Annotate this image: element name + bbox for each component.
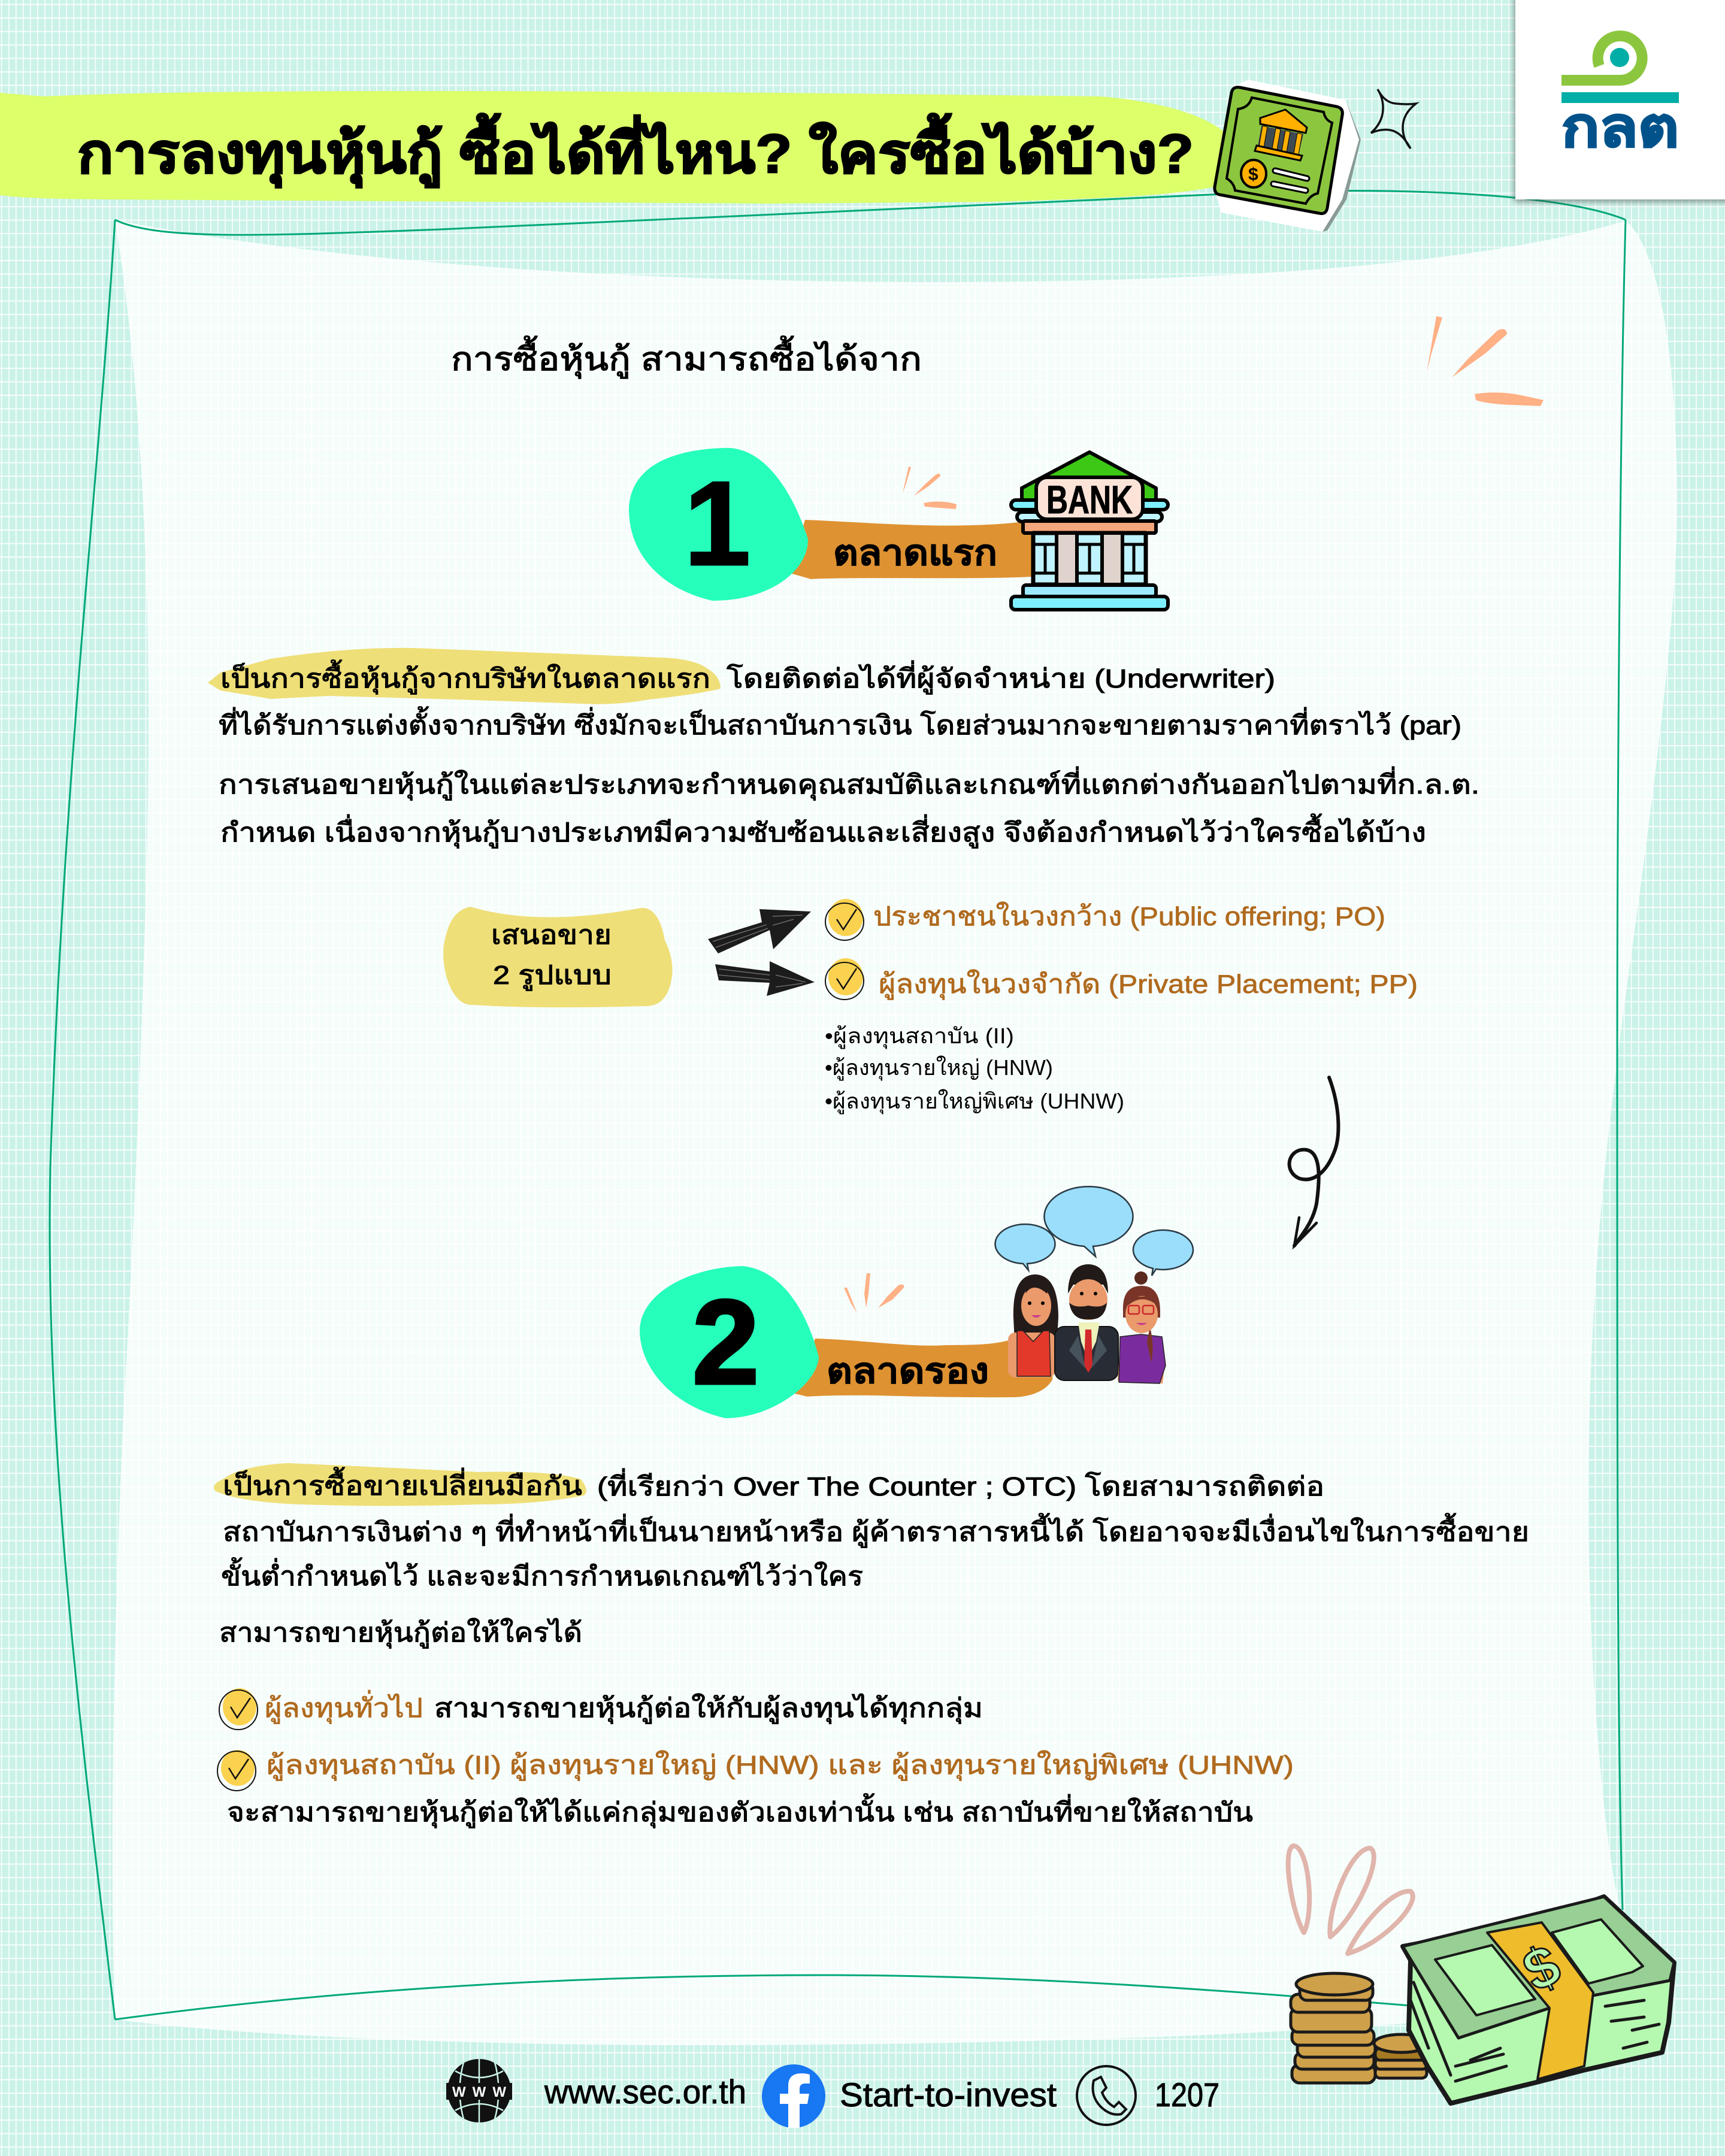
paragraph: section 2: สถาบันการเงินต่าง ๆ ที่ทำหน้าที่เป็นนายหน้าหรือ ผู้ค้าตราสารหนี้ได้ โดยอาจจะมีเงื่อนไขในการซื้อขาย xyxy=(223,1513,1529,1548)
paragraph: section 1 xyxy=(219,659,1479,849)
section 1 number: 1 xyxy=(684,457,750,591)
text: institutional investors: ผู้ลงทุนสถาบัน (II) ผู้ลงทุนรายใหญ่ (HNW) และ ผู้ลงทุนรายใหญ่พิเศษ (UHNW) xyxy=(267,1750,1294,1781)
paragraph: section 2: สามารถขายหุ้นกู้ต่อให้ใครได้ xyxy=(219,1618,582,1649)
icon: money bundle xyxy=(1403,1897,1674,2103)
arrow: curly xyxy=(1290,1077,1338,1246)
logo panel xyxy=(1515,0,1725,199)
text: general investors: ผู้ลงทุนทั่วไป xyxy=(265,1689,423,1724)
title band xyxy=(0,91,1234,204)
title: การลงทุนหุ้นกู้ ซื้อได้ที่ไหน? ใครซื้อได้บ้าง? xyxy=(77,113,1194,188)
footer xyxy=(446,2059,1219,2128)
paragraph: section 2: ขั้นต่ำกำหนดไว้ และจะมีการกำหนดเกณฑ์ไว้ว่าใคร xyxy=(221,1557,863,1591)
speech bubbles xyxy=(995,1186,1193,1276)
list: investor types xyxy=(825,1024,1124,1115)
icon: sparkle star xyxy=(1371,89,1416,149)
list: investor types: •ผู้ลงทุนรายใหญ่ (HNW) xyxy=(825,1055,1053,1081)
text: institutional investors: จะสามารถขายหุ้นกู้ต่อให้ได้แค่กลุ่มของตัวเองเท่านั้น เช่น สถาบันที่ขายให้สถาบัน xyxy=(227,1793,1253,1828)
icon: check 1 xyxy=(825,899,864,940)
paragraph: section 1: โดยติดต่อได้ที่ผู้จัดจำหน่าย (Underwriter) xyxy=(727,660,1275,695)
section 2 number blob xyxy=(640,1266,819,1418)
icon: facebook xyxy=(762,2064,825,2128)
icon: dollar sign on band: $ xyxy=(1514,1933,1570,2004)
icon: bond certificate xyxy=(1215,80,1361,232)
text: private placement: ผู้ลงทุนในวงจำกัด (Private Placement; PP) xyxy=(879,969,1418,1000)
icon: coin stacks xyxy=(1291,1973,1429,2083)
panel outline xyxy=(50,191,1626,2019)
text: general investors xyxy=(265,1689,983,1724)
decoration: pink loops xyxy=(1288,1846,1413,1954)
box: offering types xyxy=(443,907,672,1007)
paragraph: section 2: (ที่เรียกว่า Over The Counter ; OTC) โดยสามารถติดต่อ xyxy=(597,1468,1324,1501)
decoration: peach burst section 2 xyxy=(844,1273,904,1313)
icon: bank building xyxy=(1011,452,1168,610)
facebook name: Start-to-invest xyxy=(840,2076,1057,2113)
highlight: section 2 xyxy=(214,1463,586,1506)
bank sign text: BANK xyxy=(1046,477,1133,522)
logo: teal dot xyxy=(1610,48,1629,67)
list: investor types: •ผู้ลงทุนรายใหญ่พิเศษ (UHNW) xyxy=(825,1089,1124,1115)
section 2 number: 2 xyxy=(692,1276,759,1409)
people: three investors xyxy=(1008,1264,1166,1383)
section 2 label: ตลาดรอง xyxy=(827,1352,989,1391)
box: offering types: เสนอขาย xyxy=(491,920,612,950)
person: woman in purple xyxy=(1118,1271,1166,1383)
paragraph: section 2: เป็นการซื้อขายเปลี่ยนมือกัน xyxy=(223,1467,582,1501)
icon: check 4 xyxy=(217,1750,256,1791)
logo: teal bar xyxy=(1561,92,1679,103)
website: www.sec.or.th xyxy=(544,2073,746,2110)
hotline: 1207 xyxy=(1155,2076,1219,2113)
decoration: peach burst top right xyxy=(1427,316,1544,406)
person: woman in red xyxy=(1008,1274,1058,1377)
highlight: section 1 xyxy=(208,648,721,704)
arrow: to public offering xyxy=(708,909,811,953)
panel: main content sheet xyxy=(113,220,1677,2045)
subheading: การซื้อหุ้นกู้ สามารถซื้อได้จาก xyxy=(451,336,922,379)
paragraph: section 1: ที่ได้รับการแต่งตั้งจากบริษัท ซึ่งมักจะเป็นสถาบันการเงิน โดยส่วนมากจะขายตามราคาที่ตราไว้ (par) xyxy=(219,706,1461,740)
paragraph: section 1: การเสนอขายหุ้นกู้ในแต่ละประเภทจะกำหนดคุณสมบัติและเกณฑ์ที่แตกต่างกันออกไปตามที่ก.ล.ต. xyxy=(219,766,1479,801)
icon: phone xyxy=(1077,2066,1136,2125)
person: man in suit xyxy=(1055,1264,1118,1380)
icon: bond certificate: $ xyxy=(1248,165,1258,184)
arrow: to private placement xyxy=(715,961,815,996)
text: general investors: สามารถขายหุ้นกู้ต่อให้กับผู้ลงทุนได้ทุกกลุ่ม xyxy=(434,1693,983,1724)
text: public offering: ประชาชนในวงกว้าง (Public offering; PO) xyxy=(873,901,1385,931)
logo: swirl xyxy=(1561,36,1642,80)
section 1 number blob xyxy=(629,448,808,601)
logo: wordmark: กลต xyxy=(1561,97,1679,158)
section 2 ribbon xyxy=(795,1339,1054,1397)
icon: globe www: WWW xyxy=(452,2084,506,2100)
box: offering types: 2 รูปแบบ xyxy=(493,961,612,991)
icon: globe www xyxy=(446,2059,512,2123)
icon: check 2 xyxy=(825,958,864,1000)
text: institutional investors xyxy=(227,1750,1294,1828)
decoration: peach burst section 1 xyxy=(903,467,957,509)
paragraph: section 2 xyxy=(219,1467,1529,1649)
section 1 ribbon xyxy=(790,520,1039,579)
icon: check 3 xyxy=(219,1688,258,1730)
paragraph: section 1: กำหนด เนื่องจากหุ้นกู้บางประเภทมีความซับซ้อนและเสี่ยงสูง จึงต้องกำหนดไว้ว่าใครซื้อได้บ้าง xyxy=(220,813,1426,849)
list: investor types: •ผู้ลงทุนสถาบัน (II) xyxy=(825,1024,1014,1049)
paragraph: section 1: เป็นการซื้อหุ้นกู้จากบริษัทในตลาดแรก xyxy=(220,659,710,695)
section 1 label: ตลาดแรก xyxy=(833,534,997,573)
